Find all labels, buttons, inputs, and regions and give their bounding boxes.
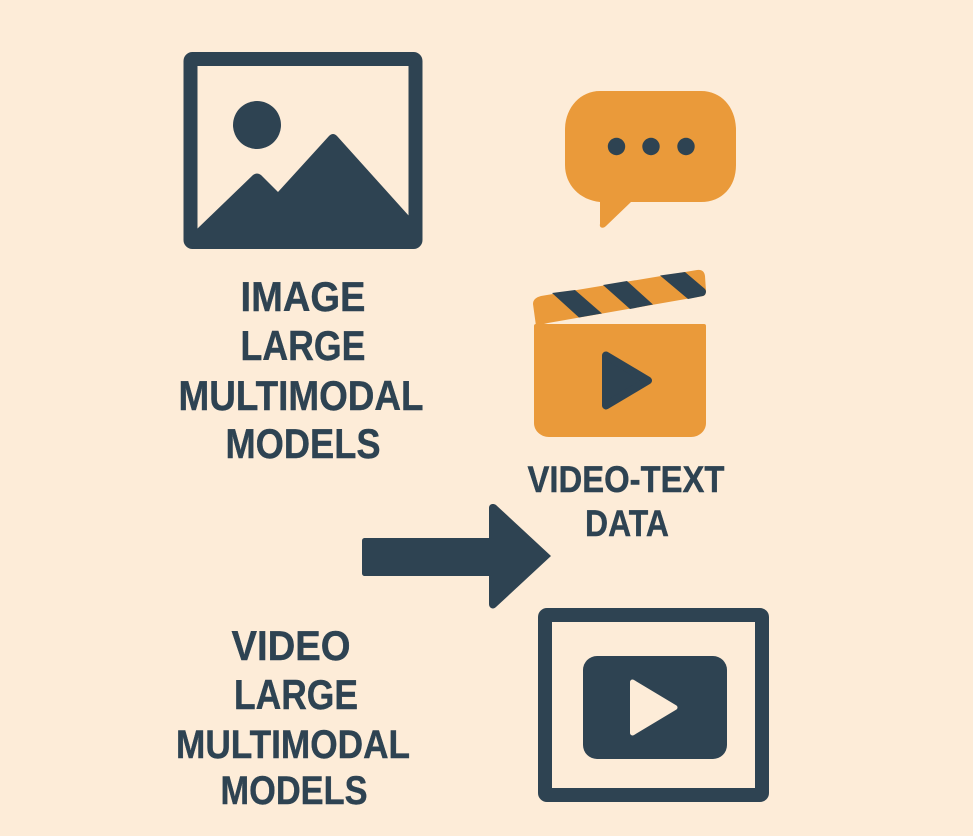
heading: video large multimodal models: MULTIMODAL [176, 723, 410, 767]
heading: image large multimodal models: IMAGE [240, 273, 366, 320]
heading: image large multimodal models: MODELS [226, 420, 380, 467]
heading: video large multimodal models: VIDEO [232, 622, 350, 669]
heading: video-text data [528, 459, 725, 544]
heading: image large multimodal models [178, 273, 424, 467]
heading: video large multimodal models: LARGE [234, 671, 358, 718]
heading: video large multimodal models: MODELS [220, 769, 368, 813]
heading: image large multimodal models: MULTIMODAL [178, 372, 424, 419]
heading: video-text data: VIDEO-TEXT [528, 459, 725, 500]
arrow [362, 504, 551, 608]
icon: clapperboard [533, 270, 706, 437]
heading: video large multimodal models [176, 622, 410, 813]
icon: image placeholder [190, 59, 416, 242]
icon: speech bubble [565, 91, 736, 228]
heading: image large multimodal models: LARGE [240, 322, 366, 369]
icon: video player [545, 615, 762, 795]
heading: video-text data: DATA [585, 503, 669, 544]
